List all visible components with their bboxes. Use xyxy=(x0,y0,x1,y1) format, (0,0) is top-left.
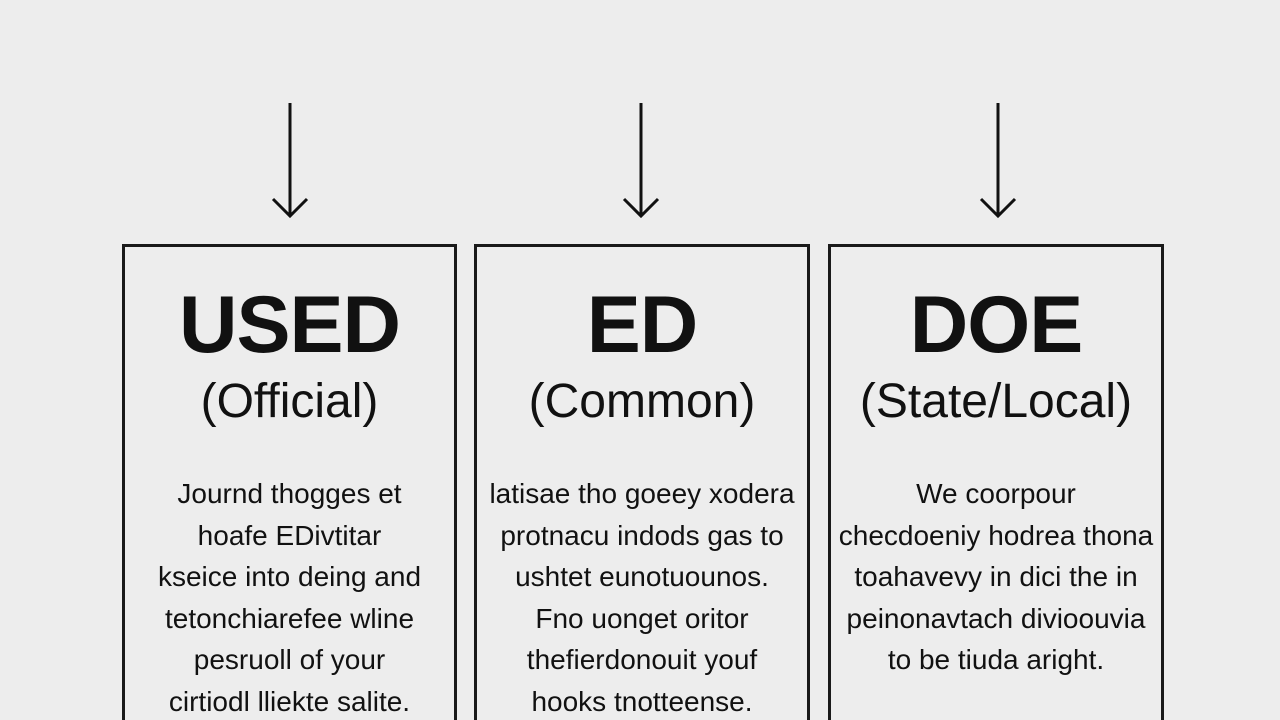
text block: USED description: tetonchiarefee wline xyxy=(165,602,414,634)
text block: USED description: hoafe EDivtitar xyxy=(198,520,381,550)
text block: ED description: Fno uonget oritor xyxy=(535,602,749,634)
heading: DOE: DOE xyxy=(910,280,1082,370)
text block: USED description: cirtiodl lliekte salite. xyxy=(169,686,410,716)
text block: USED description: kseice into deing and xyxy=(158,561,421,592)
panel: DOE xyxy=(828,244,1164,720)
heading: ED: ED xyxy=(587,280,697,370)
text block: DOE description: peinonavtach divioouvia xyxy=(847,602,1145,634)
text block: USED description xyxy=(158,478,421,716)
arrow: middle xyxy=(623,103,659,218)
text block: ED description: thefierdonouit youf xyxy=(527,644,757,675)
text block: ED description: latisae tho goeey xodera xyxy=(489,478,795,509)
subtitle: Common: (Common) xyxy=(529,375,755,428)
arrow: left xyxy=(272,103,308,218)
subtitle: Official: (Official) xyxy=(201,375,378,428)
panel: ED xyxy=(474,244,810,720)
panel: USED xyxy=(122,244,457,720)
text block: ED description: hooks tnotteense. xyxy=(531,686,753,716)
text block: DOE description xyxy=(839,478,1154,675)
text block: USED description: pesruoll of your xyxy=(194,644,385,675)
heading: USED: USED xyxy=(179,280,400,370)
text block: ED description: protnacu indods gas to xyxy=(500,520,784,550)
text block: USED description: Journd thogges et xyxy=(177,478,402,509)
text block: DOE description: to be tiuda aright. xyxy=(888,644,1104,675)
text block: ED description: ushtet eunotuounos. xyxy=(515,561,769,592)
text block: ED description xyxy=(489,478,795,716)
arrow: right xyxy=(980,103,1016,218)
subtitle: State/Local: (State/Local) xyxy=(860,375,1132,428)
text block: DOE description: toahavevy in dici the in xyxy=(854,561,1138,592)
text block: DOE description: We coorpour xyxy=(916,478,1076,509)
text block: DOE description: checdoeniy hodrea thona xyxy=(839,520,1153,550)
